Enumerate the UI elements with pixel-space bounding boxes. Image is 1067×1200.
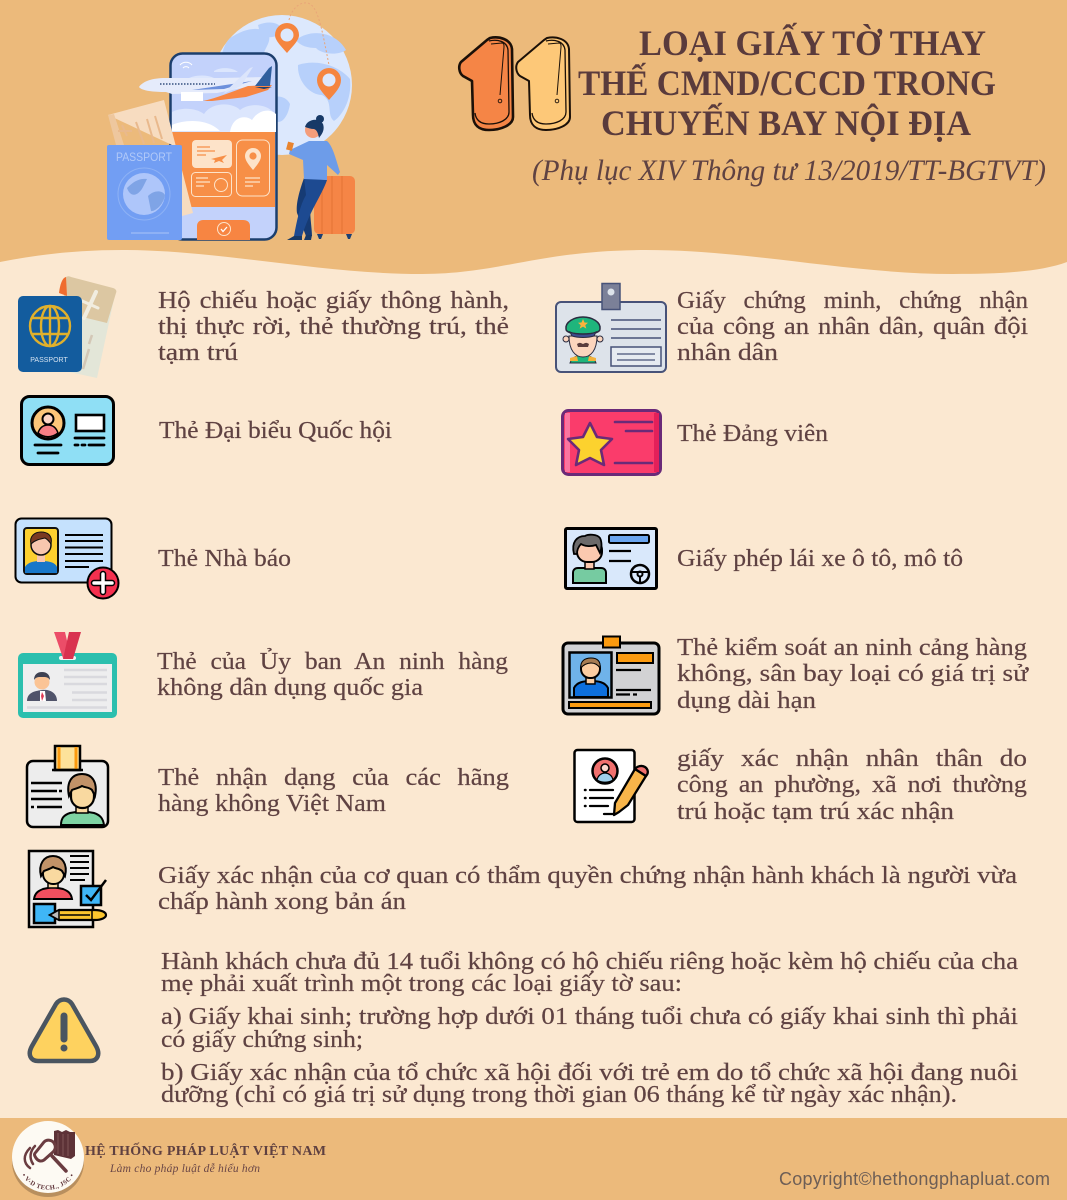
item 11: sentence completion confirmation [29, 851, 1017, 927]
text: Thẻ Đại biểu Quốc hội [159, 418, 392, 444]
footer band [0, 1118, 1067, 1200]
text: Thẻ nhận dạng của các hãng [158, 765, 509, 791]
icon: airline badge [27, 746, 108, 827]
text [157, 649, 508, 701]
big number 11 [459, 37, 570, 130]
ticket [108, 100, 193, 216]
icon: passport and ticket: PASSPORT [30, 357, 68, 364]
title [578, 23, 996, 143]
text: mẹ phải xuất trình một trong các loại giấy tờ sau: [161, 971, 682, 997]
organisation name: HỆ THỐNG PHÁP LUẬT VIỆT NAM [85, 1141, 326, 1159]
subtitle: (Phụ lục XIV Thông tư 13/2019/TT-BGTVT) [532, 154, 1046, 187]
text: nhân dân [677, 340, 778, 366]
text: hàng không Việt Nam [158, 791, 386, 817]
icon: form with person and pencil [29, 851, 106, 927]
item 3: National Assembly deputy card [22, 396, 392, 464]
item 6: driving licence [566, 528, 963, 588]
logo: • V-D TECH., JSC • [23, 1174, 72, 1190]
icon: military badge [556, 284, 666, 372]
text [677, 635, 1029, 714]
first digit [459, 37, 513, 130]
warning note [30, 949, 1018, 1108]
item 7: civil aviation security committee card [18, 632, 508, 718]
item 9: airline staff ID [27, 746, 509, 827]
text: Giấy chứng minh, chứng nhận [677, 288, 1028, 314]
text [161, 949, 1018, 1108]
icon: blue ID card [22, 396, 114, 464]
illustration: travel documents, phone, globe and traveller [107, 3, 355, 240]
item 10: identity confirmation [574, 746, 1027, 825]
icon: warning triangle [30, 1000, 98, 1061]
title: THẾ CMND/CCCD TRONG [578, 63, 996, 103]
icon: red star card [562, 410, 660, 474]
text: của công an nhân dân, quân đội [677, 314, 1028, 340]
text: thị thực rời, thẻ thường trú, thẻ [158, 314, 509, 340]
text: không dân dụng quốc gia [157, 675, 423, 701]
text: dụng dài hạn [677, 688, 816, 714]
item 2: police and military ID [556, 284, 1028, 372]
title: CHUYẾN BAY NỘI ĐỊA [601, 103, 971, 143]
text: không, sân bay loại có giá trị sử [677, 661, 1029, 687]
icon: driving licence card [566, 528, 656, 588]
woman [297, 178, 318, 236]
title: LOẠI GIẤY TỜ THAY [639, 23, 986, 63]
text: tạm trú [158, 340, 238, 366]
map pins [275, 23, 299, 53]
text: Hành khách chưa đủ 14 tuổi không có hộ chiếu riêng hoặc kèm hộ chiếu của cha [161, 949, 1018, 975]
text: Giấy phép lái xe ô tô, mô tô [677, 546, 963, 572]
text: a) Giấy khai sinh; trường hợp dưới 01 tháng tuổi chưa có giấy khai sinh thì phải [161, 1004, 1018, 1030]
icon: airport security card [563, 636, 659, 714]
slogan: Làm cho pháp luật dễ hiểu hơn [109, 1162, 260, 1175]
text: Thẻ của Ủy ban An ninh hàng [157, 649, 508, 675]
suitcase [314, 176, 355, 234]
passport [107, 145, 182, 240]
second digit [516, 37, 570, 130]
text: có giấy chứng sinh; [161, 1027, 363, 1053]
text [677, 288, 1028, 366]
logo [12, 1121, 84, 1197]
text: dưỡng (chỉ có giá trị sử dụng trong thời gian 06 tháng kể từ ngày xác nhận). [161, 1082, 957, 1108]
phone [170, 54, 276, 240]
text: công an phường, xã nơi thường [677, 772, 1027, 798]
item 5: press card [16, 518, 291, 598]
text [158, 765, 509, 817]
text [677, 746, 1027, 825]
header background with wave [0, 0, 1067, 274]
item 8: airport security control card [563, 635, 1029, 714]
item 4: party member card [562, 410, 828, 474]
illustration: travel documents, phone, globe and traveller: PASSPORT [116, 150, 173, 164]
icon: teal lanyard badge [18, 632, 117, 718]
icon: passport and ticket [18, 276, 116, 378]
text: Giấy xác nhận của cơ quan có thẩm quyền chứng nhận hành khách là người vừa [158, 863, 1017, 889]
text: Thẻ kiểm soát an ninh cảng hàng [677, 635, 1027, 661]
plane [139, 77, 265, 94]
item 1: passport [18, 276, 509, 378]
copyright: Copyright©hethongphapluat.com [779, 1169, 1050, 1189]
text: b) Giấy xác nhận của tổ chức xã hội đối với trẻ em do tổ chức xã hội đang nuôi [161, 1060, 1018, 1086]
text: giấy xác nhận nhân thân do [677, 746, 1027, 772]
text: Hộ chiếu hoặc giấy thông hành, [158, 288, 509, 314]
text [158, 863, 1017, 915]
icon: document with pencil [574, 750, 648, 822]
text [158, 288, 509, 366]
icon: press card with plus [16, 518, 118, 598]
text: Thẻ Nhà báo [158, 546, 291, 572]
text: chấp hành xong bản án [158, 889, 406, 915]
text: Thẻ Đảng viên [677, 421, 828, 447]
text: trú hoặc tạm trú xác nhận [677, 799, 954, 825]
